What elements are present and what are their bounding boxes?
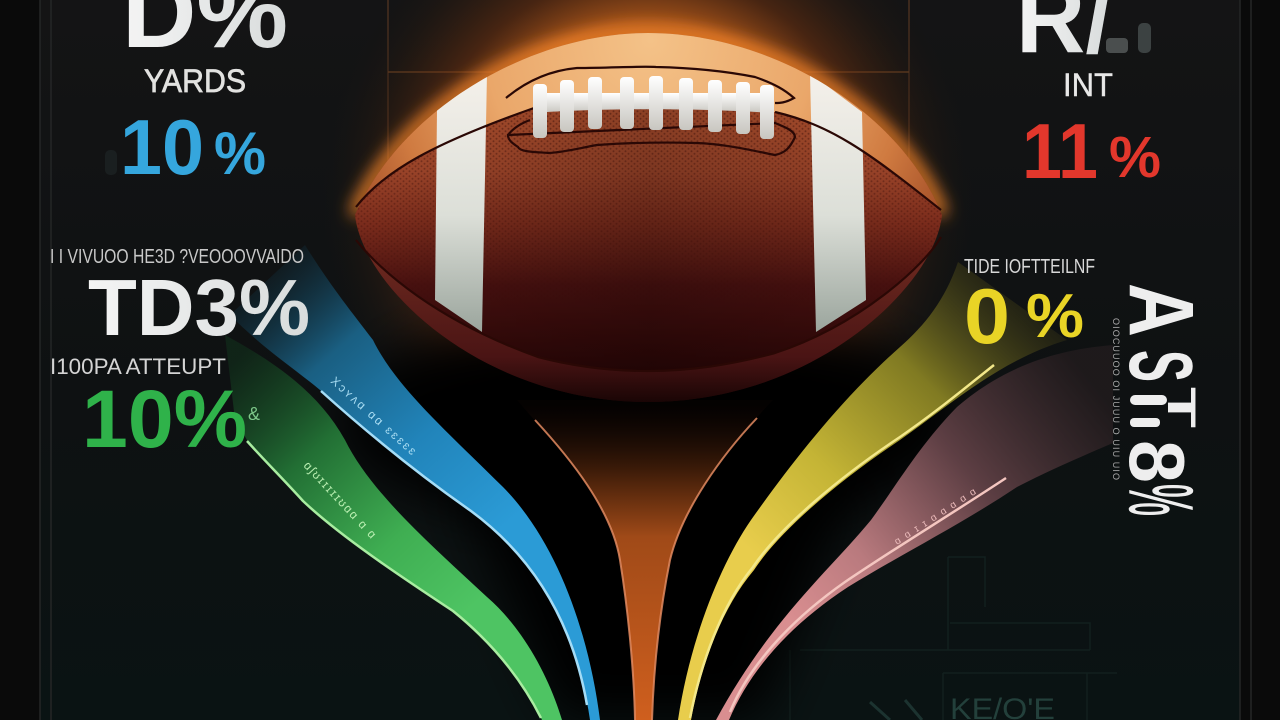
ribbon: blue — [230, 245, 600, 720]
faint play diagram, bottom right — [790, 557, 1117, 720]
ball stripe: right — [810, 73, 866, 332]
vertical stat: ASTI/8%: T — [1159, 387, 1203, 428]
infographic canvas: % — [1110, 484, 1210, 516]
stat: red 11%: 11 — [1022, 107, 1098, 195]
central dark area between ribbons — [420, 400, 890, 720]
stat: blue 10%: 10 — [120, 103, 204, 191]
label: yellow stat caption: TIDE IOFTTEILNF — [964, 256, 1095, 278]
label: INT: INT — [1063, 67, 1113, 103]
stat: yellow 0% — [964, 272, 1084, 360]
ball pebbled texture — [355, 109, 942, 260]
stat: red 11%: % — [1109, 125, 1161, 190]
vertical stat: ASTI/8%: 8 — [1113, 440, 1201, 483]
stat: red 11% — [1022, 107, 1161, 195]
ribbon highlight: pink — [730, 478, 1006, 712]
stat: blue 10% — [105, 103, 266, 191]
ribbon highlight: blue — [321, 391, 587, 705]
ribbon: green — [225, 335, 562, 720]
orange glow behind ball — [300, 0, 1000, 420]
stat: yellow 0%: % — [1026, 282, 1084, 351]
label: attempt caption: I100PA ATTEUPT — [50, 354, 226, 379]
ribbon highlight: yellow — [690, 365, 994, 718]
small caption above TD3%: I I VIVUOO HE3D ?VEOOOVVAIDO — [50, 246, 304, 268]
vertical stat: ASTI/8%: S — [1110, 350, 1210, 382]
ball lit top panel — [364, 33, 938, 206]
ball seams — [356, 67, 941, 371]
stat: yellow 0%: 0 — [964, 272, 1010, 360]
ball centre shading — [414, 109, 885, 370]
stat: blue 10%: % — [214, 120, 266, 187]
ribbon caption: green: ɑʃʊɪɪɪɪɪʊɑɑ ɑ ɑ — [301, 458, 379, 541]
ball shadow — [340, 310, 960, 530]
ball stripe: left — [435, 73, 487, 332]
ball underside band — [370, 257, 928, 392]
stat: TD3%: TD3% — [88, 263, 310, 352]
football — [355, 33, 942, 402]
vertical caption: OIOCUUOO OI JUUU O UIU UIO — [1111, 318, 1121, 480]
stat: green 10%: & — [248, 404, 260, 424]
vertical stat: ASTI/8%: A — [1110, 283, 1212, 337]
ribbon: yellow — [678, 262, 1067, 720]
ribbon caption: blue: Xɔʏʌɑ ɑɑ ɛɛɛɛɛ — [328, 374, 419, 458]
stat: green 10%: 10% — [82, 374, 247, 465]
ribbon highlight: green — [247, 441, 541, 718]
ribbon: orange — [517, 400, 773, 720]
ribbon: pink — [716, 345, 1113, 720]
ribbon caption: pink: ɑ ɑ ɪ ɪ ɑ ɑ ɑ ɑ ɑ — [893, 487, 978, 548]
label: YARDS: YARDS — [144, 63, 246, 99]
ribbon edges: orange — [535, 418, 757, 720]
vertical stat: ASTI/8% — [1110, 283, 1212, 516]
ball laces — [533, 76, 774, 139]
ball leather lower body — [355, 33, 942, 402]
